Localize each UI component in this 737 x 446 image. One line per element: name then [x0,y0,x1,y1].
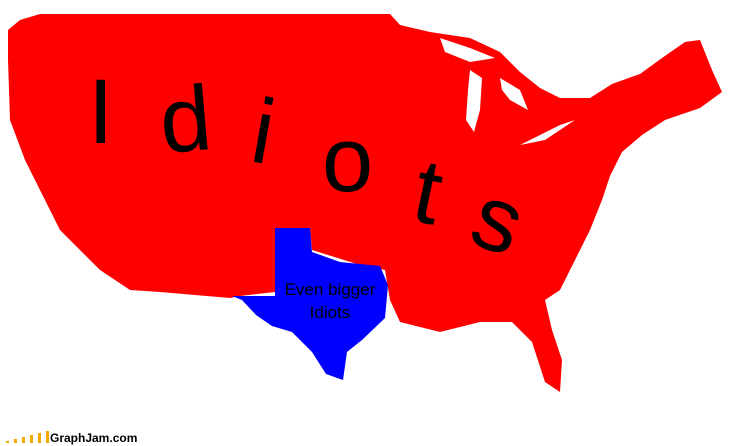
title letters: Idiots: s [459,164,537,276]
region: Texas (blue) [232,228,388,380]
title letters: Idiots: t [405,139,451,245]
footer: GraphJam logo: GraphJam.com [50,431,137,445]
title letters: Idiots: d [156,67,215,173]
label: Even bigger Idiots: Idiots [310,303,350,322]
lakes (white cutouts) [440,38,495,62]
footer: GraphJam logo [6,431,137,445]
title letters: Idiots [88,61,537,276]
title letters: Idiots: i [244,80,282,184]
title letters: Idiots: o [322,109,373,211]
title letters: Idiots: I [88,61,114,163]
label: Even bigger Idiots: Even bigger [285,280,375,299]
label: Even bigger Idiots [285,280,376,322]
